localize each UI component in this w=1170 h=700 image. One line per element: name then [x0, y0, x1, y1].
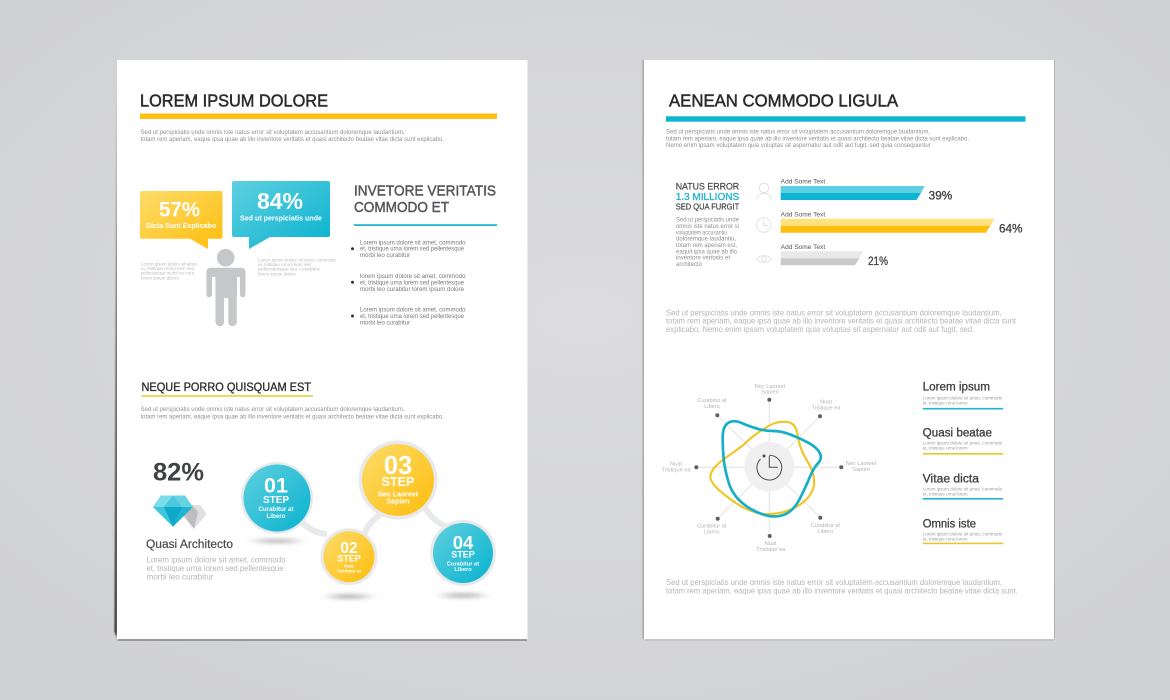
step 02 — [324, 531, 374, 582]
legend item: Lorem ipsum: Lorem ipsum — [923, 382, 990, 394]
callout: 84%: 84% — [257, 188, 303, 214]
stat block: Natus error: voluptatem accusantiu — [676, 229, 727, 236]
text block: Quasi Architecto: et, tristique urna lorem sed pellentesque — [146, 563, 284, 573]
text block: right of person: Lorem ipsum dolore sit amet, commodo — [258, 258, 336, 262]
panel: right page — [643, 60, 1055, 640]
bullet list: morbi leo curabitur — [360, 252, 410, 259]
stat block: Natus error: omnis iste natus error si — [676, 223, 739, 230]
step 01: 01 — [264, 474, 288, 498]
legend — [923, 382, 1003, 544]
callout: 57%: Dicta Sunt Explicabo — [146, 221, 216, 230]
callout: 57% — [140, 191, 222, 249]
text block: Quasi Architecto: Quasi Architecto — [146, 539, 233, 551]
legend item: Omnis iste: Lorem ipsum dolore sit amet, commodo — [923, 532, 1003, 537]
step 04: STEP — [451, 550, 475, 560]
callout: 57%: 57% — [159, 198, 200, 222]
radial labels: Sapien — [852, 467, 870, 473]
text block: Quasi Architecto: Lorem ipsum dolore sit amet, commodo — [146, 555, 286, 565]
paragraph: middle — [666, 307, 1017, 334]
chart: step flow — [241, 440, 496, 598]
step 04: 04 — [453, 532, 474, 553]
radial labels: Curabitur at — [697, 398, 727, 404]
text block: left of person: et, tristique urna lorem sed — [141, 266, 194, 271]
stat block: Natus error: architecto — [676, 261, 703, 268]
text block: left of person: pellentesque morbi leo cura — [141, 270, 194, 276]
intro paragraph: Nemo enim ipsam voluptatem quia voluptas sit aspernatur aut odit aut fugit, sed quia consequuntur — [666, 142, 932, 149]
legend item: Quasi beatae: Quasi beatae — [923, 428, 992, 440]
legend item: Vitae dicta — [923, 473, 1003, 500]
section paragraph: totam rem aperiam, eaque ipsa quae ab illo inventore veritatis et quasi architecto beatae vitae dicta sunt explicabo. — [140, 413, 444, 420]
icon: clock outline — [756, 218, 771, 232]
stat block: Natus error: eaquit ipsa quae ab illo — [676, 248, 738, 255]
stat block: Natus error: Sed ut perspiciatis unde — [676, 217, 740, 224]
stat block: Natus error — [676, 181, 740, 268]
bar: 64%: 64% — [999, 224, 1022, 236]
bullet list: Lorem ipsum dolore sit amet, commodo — [360, 240, 466, 246]
intro paragraph — [140, 129, 444, 143]
legend item: Omnis iste — [923, 519, 1003, 544]
bullet list: lorem ipsum dolore sit amet, commodo — [360, 273, 466, 280]
icon: person — [206, 249, 246, 326]
legend item: Quasi beatae — [923, 428, 1003, 455]
text block: right of person — [258, 258, 336, 276]
step 04: Libero — [454, 567, 472, 573]
legend item: Vitae dicta: Lorem ipsum dolore sit amet, commodo — [923, 486, 1003, 491]
heading rule — [354, 224, 497, 226]
heading: Invetore veritatis: INVETORE VERITATIS — [354, 183, 496, 200]
step 01 — [244, 464, 310, 532]
stat: 82%: 82% — [153, 459, 204, 487]
step 04: Curabitur at — [447, 561, 479, 567]
bar: 21%: 21% — [868, 256, 888, 268]
icon: diamonds — [153, 496, 207, 529]
radial labels: Nec Laoreet — [755, 384, 786, 390]
heading: Neque porro: NEQUE PORRO QUISQUAM EST — [142, 382, 311, 394]
radial labels — [661, 384, 877, 553]
legend item: Quasi beatae: Lorem ipsum dolore sit amet, commodo — [923, 441, 1003, 446]
legend item: Omnis iste: Omnis iste — [923, 519, 976, 531]
radial labels: Libero — [704, 404, 720, 410]
text block: Quasi Architecto: morbi leo curabitur — [146, 571, 214, 581]
step 02: 02 — [340, 540, 358, 557]
step 02: Tristique ea — [337, 568, 362, 574]
callout: 84%: Sed ut perspiciatis unde — [240, 214, 322, 222]
text block: right of person: lorem ipsum dolore — [258, 272, 296, 276]
paragraph: bottom: Sed ut perspiciatis unde omnis iste natus error sit voluptatem accusantium doloremque laudantium, — [666, 577, 1002, 587]
legend item: Vitae dicta: Vitae dicta — [923, 473, 980, 485]
stat block: Natus error: doloremque laudantiu, — [676, 236, 736, 243]
text block: Quasi Architecto — [146, 539, 286, 581]
bar: 39% — [781, 179, 952, 202]
bullet list: morbi leo curabitur — [360, 319, 410, 326]
radial labels: Nec Laoreet — [846, 461, 877, 467]
radial labels: Libero — [704, 529, 719, 535]
paragraph: bottom — [666, 577, 1018, 595]
radial labels: Tristique ea — [661, 468, 691, 474]
chart: radial diagram — [661, 384, 877, 553]
stat block: Natus error: 1.3 MILLIONS — [676, 191, 739, 203]
intro paragraph: totam rem aperiam, eaque ipsa quae ab illo inventore veritatis et quasi architecto beatae vitae dicta sunt explicabo. — [666, 135, 969, 142]
step 03 — [362, 444, 434, 516]
legend item: Lorem ipsum — [923, 382, 1003, 410]
bar: 39%: 39% — [929, 190, 952, 202]
callout: 84% — [232, 181, 330, 249]
bar: 21%: Add Some Text — [781, 244, 825, 251]
title rule — [666, 116, 1026, 122]
heading underline — [142, 395, 313, 397]
radial labels: Curabitur at — [811, 523, 840, 529]
bullet list: Lorem ipsum dolore sit amet, commodo — [360, 307, 466, 314]
step 01: STEP — [263, 495, 289, 506]
text block: right of person: et, tristique urna lorem sed — [258, 262, 311, 267]
intro paragraph: Sed ut perspiciatis unde omnis iste natus error sit voluptatem accusantium doloremque laudantium, — [140, 129, 405, 136]
panel: left page — [114, 60, 528, 640]
radial labels: Sapien — [761, 390, 779, 396]
legend item: Quasi beatae: et, tristique urna lorem — [923, 446, 968, 451]
legend item: Omnis iste: et, tristique urna lorem — [923, 537, 968, 542]
step 01: Libero — [267, 513, 286, 520]
blob: teal — [723, 421, 821, 516]
bar: 64%: Add Some Text — [781, 211, 825, 218]
stat block: Natus error: SED QUA FURGIT — [676, 201, 739, 211]
radial labels: Nuat — [820, 400, 832, 406]
bar: 39%: Add Some Text — [781, 179, 825, 186]
bar chart — [781, 179, 1022, 268]
paragraph: middle: totam rem aperiam, eaque ipsa quae ab illo inventore veritatis et quasi architecto beatae vitae dicta sunt — [666, 316, 1017, 326]
bar: 21% — [781, 244, 888, 268]
stat block: Natus error: totam rem aperiam est, — [676, 242, 737, 249]
radial labels: Curabitur at — [697, 523, 727, 529]
legend item: Lorem ipsum: et, tristique urna lorem — [923, 400, 968, 405]
bullet list: morbi leo curabitur lorem ipsum dolore — [360, 286, 465, 293]
title: Aenean commodo ligula: AENEAN COMMODO LIGULA — [669, 90, 898, 110]
legend item: Vitae dicta: et, tristique urna lorem — [923, 491, 968, 496]
step 03: STEP — [382, 475, 414, 489]
text block: left of person: lorem ipsum dolore — [141, 276, 179, 280]
legend item: Lorem ipsum: Lorem ipsum dolore sit amet, commodo — [923, 395, 1003, 400]
radial labels: Tristique ea — [756, 547, 786, 553]
bar: 64% — [781, 211, 1022, 236]
intro paragraph — [666, 129, 969, 149]
bullet list: et, tristique urna lorem sed pellentesque — [360, 280, 465, 286]
step 03: 03 — [384, 452, 412, 480]
bullet list: et, tristique urna lorem sed pellentesque — [360, 313, 465, 320]
title rule — [140, 114, 497, 119]
intro paragraph: Sed ut perspiciatis unde omnis iste natus error sit voluptatem accusantium doloremque laudantium, — [666, 129, 930, 136]
step 02: Nuat — [344, 564, 354, 569]
text block: left of person — [141, 262, 198, 280]
stat block: Natus error: NATUS ERROR — [676, 181, 739, 192]
bullet list: et, tristique urna lorem sed pellentesque — [360, 246, 465, 253]
icon: clock — [757, 455, 782, 480]
step 01: Curabitur at — [258, 506, 294, 513]
radial labels: Nuat — [765, 541, 777, 547]
paragraph: middle: Sed ut perspiciatis unde omnis iste natus error sit voluptatem accusantium doloremque laudantium, — [666, 307, 1002, 317]
heading: Invetore veritatis: COMMODO ET — [354, 199, 449, 216]
blob: yellow — [710, 422, 814, 514]
text block: left of person: Lorem ipsum dolore sit amet, — [141, 262, 198, 266]
paragraph: middle: explicabo. Nemo enim ipsam voluptatem quia voluptas sit aspernatur aut odit aut fugit, sed. — [666, 324, 974, 334]
radial labels: Nuat — [670, 462, 682, 468]
icon: eye outline — [756, 256, 772, 262]
paragraph: bottom: totam rem aperiam, eaque ipsa quae ab illo inventore veritatis et quasi architecto beatae vitae dicta sunt. — [666, 585, 1018, 595]
stat block: Natus error: inventore veritatis et — [676, 255, 730, 262]
heading: Invetore veritatis — [354, 183, 496, 216]
radial labels: Tristique ea — [811, 405, 841, 411]
title: Lorem ipsum dolore: LOREM IPSUM DOLORE — [140, 90, 328, 110]
section paragraph: Sed ut perspiciatis unde omnis iste natus error sit voluptatem accusantium doloremque laudantium, — [140, 406, 405, 413]
bullet list — [351, 240, 466, 326]
section paragraph — [140, 406, 444, 420]
text block: right of person: pellentesque leo curabitur — [258, 266, 321, 272]
intro paragraph: totam rem aperiam, eaque ipsa quae ab illo inventore veritatis et quasi architecto beatae vitae dicta sunt explicabo. — [140, 136, 444, 143]
radial labels: Libero — [818, 529, 833, 535]
step 03: Sapien — [387, 498, 409, 506]
step 04 — [433, 523, 493, 583]
step 03: Nec Laoreet — [378, 491, 419, 498]
icon: person outline — [756, 183, 772, 200]
step 02: STEP — [337, 553, 361, 563]
